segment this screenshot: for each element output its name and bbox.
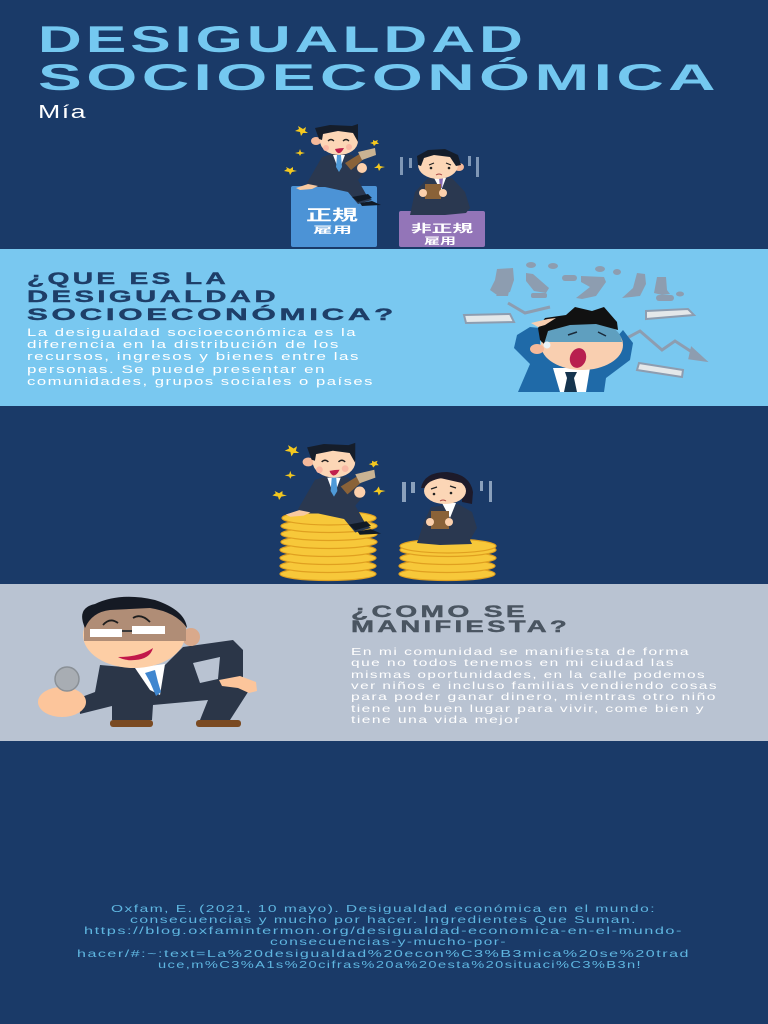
coin stack: short bbox=[399, 539, 496, 580]
falling arrow bbox=[508, 303, 704, 360]
heading: ¿COMO SE bbox=[351, 602, 528, 621]
coin hand bbox=[38, 687, 86, 717]
references: uce,m%C3%A1s%20cifras%20a%20esta%20situaci%C3%B3n! bbox=[158, 959, 642, 971]
motion lines bbox=[400, 156, 479, 177]
body text: comunidades, grupos sociales o países bbox=[27, 376, 374, 388]
heading bbox=[351, 602, 570, 636]
block: irregular employment bbox=[399, 211, 485, 247]
head bbox=[182, 628, 200, 646]
shoes bbox=[110, 720, 153, 727]
body text: recursos, ingresos y bienes entre las bbox=[27, 351, 360, 363]
heading: DESIGUALDAD bbox=[27, 287, 279, 306]
body text bbox=[27, 327, 374, 388]
block: irregular employment: 雇用 bbox=[424, 236, 456, 246]
references: consecuencias y mucho por hacer. Ingredientes Que Suman. bbox=[130, 914, 637, 926]
figure: sad man bbox=[410, 149, 470, 215]
title: SOCIOECONÓMICA bbox=[38, 56, 720, 98]
panel: what is inequality bbox=[0, 249, 768, 406]
glasses bbox=[90, 629, 122, 637]
references: Oxfam, E. (2021, 10 mayo). Desigualdad económica en el mundo: bbox=[111, 903, 656, 915]
heading bbox=[27, 269, 397, 324]
body text: ver niños e incluso familias vendiendo cosas bbox=[351, 680, 718, 692]
body text bbox=[351, 646, 718, 726]
head bbox=[541, 320, 623, 370]
suit and arms bbox=[514, 327, 633, 392]
body text: tiene un buen lugar para vivir, come bien y bbox=[351, 703, 705, 715]
motion lines bbox=[402, 481, 492, 502]
hand on knee bbox=[219, 676, 257, 693]
panel: how it manifests bbox=[0, 584, 768, 741]
heading: SOCIOECONÓMICA? bbox=[27, 305, 397, 324]
illustration: employees on status blocks bbox=[284, 124, 485, 247]
author: Mía bbox=[38, 102, 87, 122]
figure: sad woman bbox=[417, 472, 477, 545]
figure: happy man bbox=[272, 443, 386, 535]
references bbox=[77, 903, 690, 971]
block: irregular employment: 非正規 bbox=[411, 221, 473, 235]
block: regular employment bbox=[291, 186, 377, 247]
body text: que no todos tenemos en mi ciudad las bbox=[351, 657, 675, 669]
figure: happy man bbox=[284, 124, 385, 206]
heading: ¿QUE ES LA bbox=[27, 269, 229, 288]
references: hacer/#:~:text=La%20desigualdad%20econ%C3%B3mica%20se%20trad bbox=[77, 948, 690, 960]
block: regular employment: 雇用 bbox=[313, 225, 352, 235]
references: https://blog.oxfamintermon.org/desigualdad-economica-en-el-mundo- bbox=[84, 925, 683, 937]
references: consecuencias-y-mucho-por- bbox=[270, 936, 507, 948]
block: regular employment: 正規 bbox=[306, 207, 358, 224]
body text: personas. Se puede presentar en bbox=[27, 364, 326, 376]
heading: MANIFIESTA? bbox=[351, 617, 570, 636]
title bbox=[38, 19, 720, 98]
bank notes bbox=[464, 309, 694, 377]
suit bbox=[79, 640, 248, 720]
illustration: man and woman on coin stacks bbox=[272, 443, 496, 580]
body text: mismas oportunidades, en la calle podemos bbox=[351, 669, 706, 681]
illustration: worried man with falling money bbox=[464, 262, 704, 392]
body text: En mi comunidad se manifiesta de forma bbox=[351, 646, 690, 658]
title: DESIGUALDAD bbox=[38, 19, 527, 60]
body text: tiene una vida mejor bbox=[351, 714, 521, 726]
illustration: crouching man holding a coin bbox=[38, 597, 257, 727]
coin stack: tall bbox=[280, 511, 377, 580]
body text: para poder ganar dinero, mientras otro niño bbox=[351, 691, 717, 703]
body text: diferencia en la distribución de los bbox=[27, 339, 340, 351]
body text: La desigualdad socioeconómica es la bbox=[27, 327, 357, 339]
lettering blobs bbox=[490, 262, 684, 301]
